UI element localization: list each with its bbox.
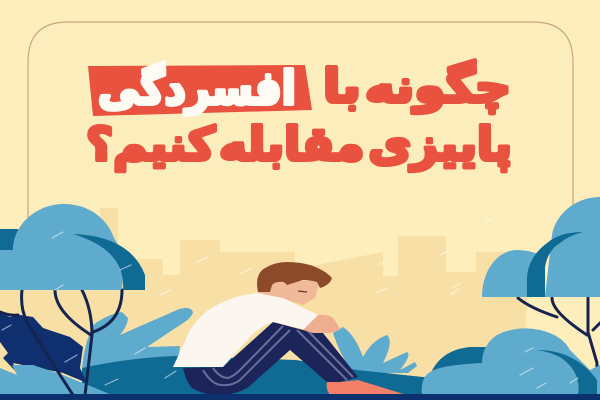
highlight box <box>88 65 312 116</box>
plant: light blue leaves right of person <box>333 327 417 373</box>
plant: dark navy foliage left <box>0 313 87 383</box>
dark canopy back <box>0 229 18 252</box>
left tree <box>0 204 145 395</box>
skyline silhouette <box>0 208 530 378</box>
dark crescent <box>527 232 583 297</box>
small light dome <box>482 250 545 297</box>
dark crescent <box>537 350 597 395</box>
heading: second line: پاییزی مقابله کنیم؟ <box>86 117 512 172</box>
title <box>86 59 512 172</box>
ground strip <box>0 394 600 400</box>
foot <box>327 380 410 398</box>
heading: highlighted word: افسردگی <box>98 61 296 115</box>
large light dome <box>545 197 600 297</box>
panel: rounded card outline <box>28 22 573 225</box>
dark crescent <box>73 234 145 290</box>
right tree <box>482 197 600 395</box>
bush: light blue bottom left <box>0 365 112 395</box>
light bush <box>422 328 600 395</box>
tree trunks <box>0 290 122 395</box>
trousers <box>183 322 358 395</box>
trouser stripes <box>203 326 353 385</box>
plant: light blue leaves behind person <box>82 308 193 372</box>
bush: bottom right <box>422 328 600 395</box>
rain streaks <box>2 218 578 388</box>
hand <box>303 315 340 333</box>
closed eye <box>298 291 307 292</box>
person sitting <box>173 262 410 398</box>
light canopy <box>0 204 123 290</box>
tree trunks <box>518 298 600 395</box>
dark back of bush <box>430 347 490 375</box>
shirt <box>173 293 318 367</box>
hair <box>257 262 332 292</box>
heading: first line: چگونه با <box>323 59 511 114</box>
face <box>258 280 320 305</box>
ground hill <box>82 356 432 395</box>
